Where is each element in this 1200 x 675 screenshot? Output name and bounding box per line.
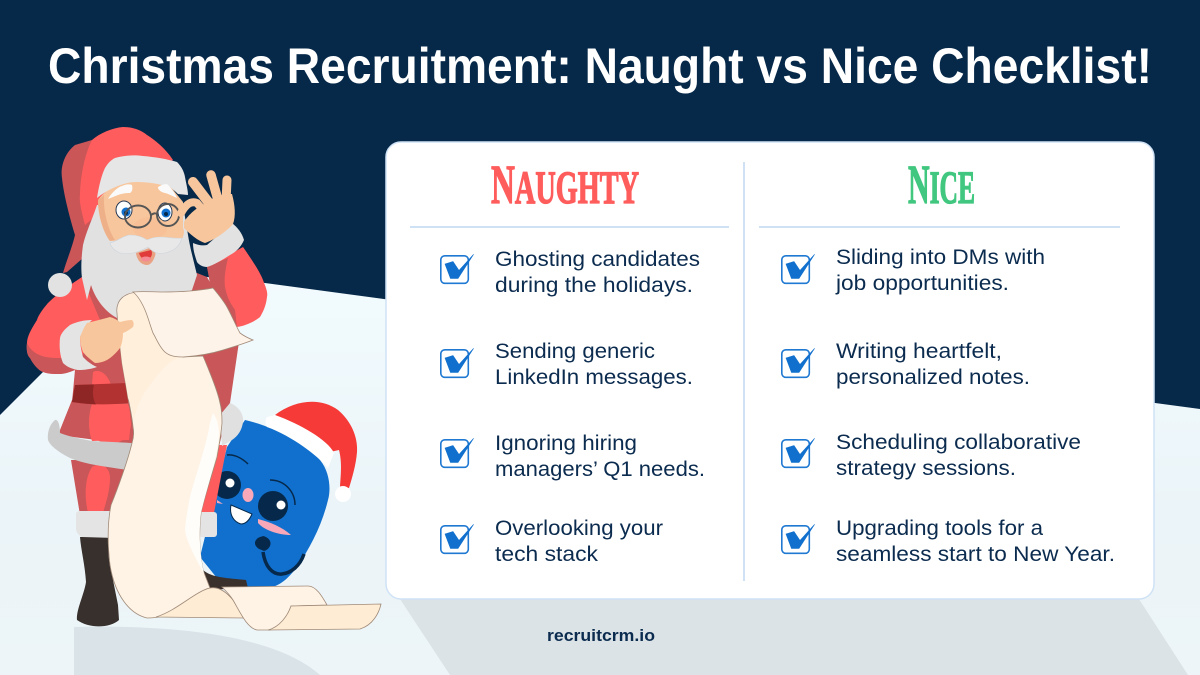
nice item 1 xyxy=(782,246,1045,295)
nice item 3 xyxy=(782,431,1081,480)
mascot with santa hat xyxy=(200,402,357,588)
santa glasses xyxy=(125,204,179,228)
nice item 3: Scheduling collaborative xyxy=(836,431,1081,454)
nice item 2: personalized notes. xyxy=(836,366,1030,389)
mascot face xyxy=(213,455,304,574)
nice item 4: Upgrading tools for a xyxy=(836,517,1043,540)
nice item 1: Sliding into DMs with xyxy=(836,246,1045,269)
mascot hat brim xyxy=(266,415,334,468)
card panel xyxy=(386,142,1154,599)
santa coat fur band xyxy=(48,420,132,470)
nice item 4 xyxy=(782,517,1115,566)
santa raised hand xyxy=(181,175,235,243)
santa lower coat xyxy=(58,400,135,445)
santa chest highlight xyxy=(92,371,111,385)
nice item 2 xyxy=(782,340,1030,389)
naughty item 1: during the holidays. xyxy=(495,274,693,297)
scroll top curl xyxy=(133,288,253,357)
santa lower coat highlight xyxy=(89,404,130,441)
santa left boot cuff xyxy=(76,511,115,538)
santa torso xyxy=(72,273,240,450)
naughty item 3: Ignoring hiring xyxy=(495,432,637,455)
santa nose xyxy=(133,217,167,239)
column divider xyxy=(743,162,745,581)
naughty item 1 xyxy=(441,248,700,297)
santa eyes xyxy=(116,201,172,221)
santa holding hand xyxy=(80,317,134,363)
scroll upper back shade xyxy=(118,293,183,420)
naughty item 3: managers’ Q1 needs. xyxy=(495,458,705,481)
santa raised arm xyxy=(207,247,267,330)
santa left leg xyxy=(71,460,135,515)
naughty item 4: tech stack xyxy=(495,543,599,566)
santa raised cuff xyxy=(193,223,244,267)
nice item 2: Writing heartfelt, xyxy=(836,340,1002,363)
scroll floor fold xyxy=(156,588,244,618)
scroll xyxy=(108,288,381,630)
naughty item 2 xyxy=(441,340,693,389)
nice item 4: seamless start to New Year. xyxy=(836,543,1115,566)
santa moustache xyxy=(110,235,182,254)
santa face xyxy=(98,180,184,241)
santa hat brim xyxy=(97,155,188,198)
santa left boot xyxy=(77,537,119,626)
naughty item 1: Ghosting candidates xyxy=(495,248,700,271)
santa coat fur band right xyxy=(220,403,243,446)
santa claus xyxy=(27,127,381,630)
naughty item 3 xyxy=(441,432,705,481)
naughty item 4 xyxy=(441,517,663,566)
naughty item 2: Sending generic xyxy=(495,340,655,363)
santa right leg xyxy=(198,445,227,513)
santa beard xyxy=(81,205,197,318)
santa left arm xyxy=(27,277,100,374)
scroll floor middle xyxy=(222,586,327,630)
nice item 1: job opportunities. xyxy=(835,272,1009,295)
mascot hat pompom xyxy=(335,486,351,502)
santa belt xyxy=(72,383,128,404)
naughty item 2: LinkedIn messages. xyxy=(495,366,693,389)
santa left cuff xyxy=(60,320,97,370)
naughty item 4: Overlooking your xyxy=(495,517,663,540)
rear boot xyxy=(203,570,248,590)
santa hat xyxy=(62,127,173,273)
santa eyebrows xyxy=(108,184,177,199)
scroll side highlight xyxy=(185,413,219,574)
scroll body xyxy=(108,293,222,618)
santa mouth xyxy=(136,247,155,265)
heading: naughty: NAUGHTY xyxy=(491,154,639,215)
nice item 3: strategy sessions. xyxy=(836,457,1016,480)
mascot body xyxy=(200,420,329,588)
footer url: recruitcrm.io xyxy=(547,626,655,645)
snowy hills xyxy=(0,270,1200,675)
santa right boot-top xyxy=(198,512,217,537)
mascot hat xyxy=(275,402,357,488)
scroll end xyxy=(268,604,381,630)
heading: nice: NICE xyxy=(908,154,975,215)
santa hat pompom xyxy=(48,273,72,297)
